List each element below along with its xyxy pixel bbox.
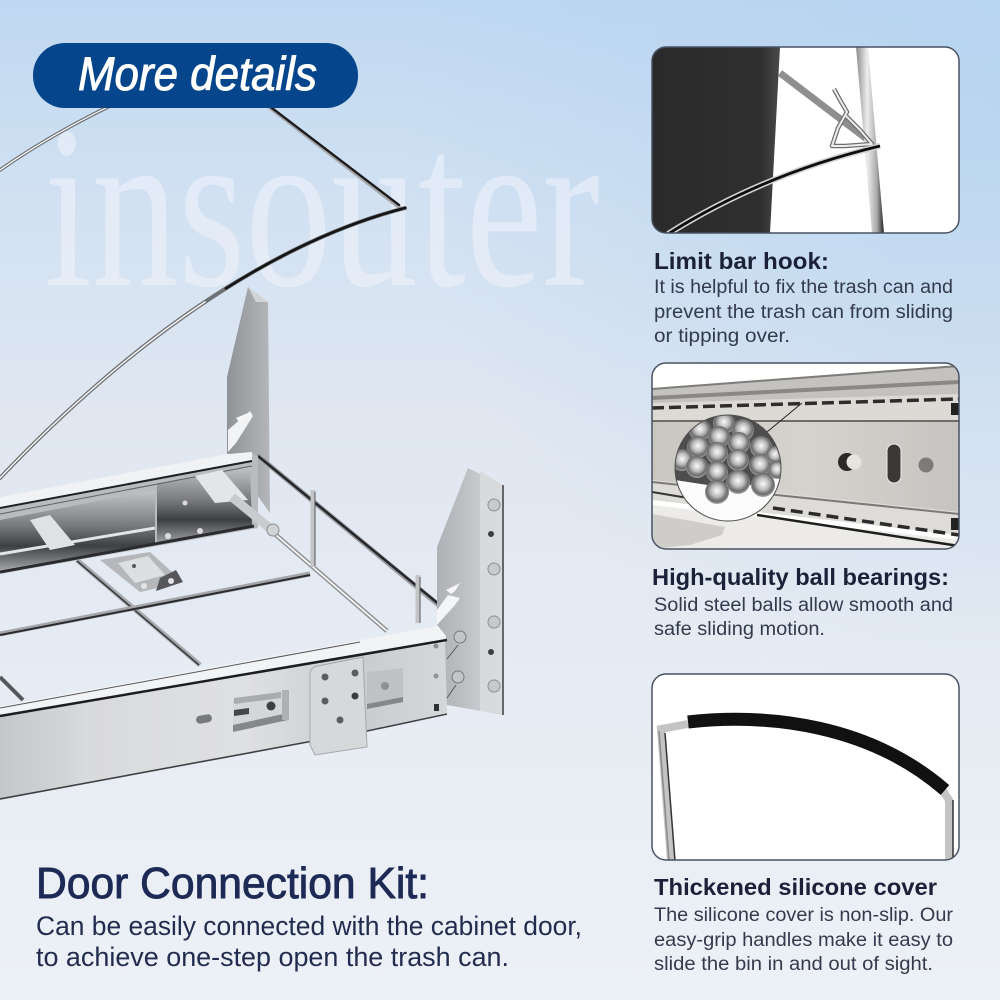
description	[654, 905, 954, 975]
heading: High-quality ball bearings:	[652, 564, 949, 590]
magnified ball bearings	[671, 412, 786, 521]
back bracket	[227, 287, 270, 513]
description: Solid steel balls allow smooth and	[654, 595, 953, 616]
panel: limit bar hook photo	[652, 47, 959, 234]
description: to achieve one-step open the trash can.	[36, 942, 509, 972]
pin	[232, 497, 279, 536]
text block: ball bearings	[652, 564, 953, 640]
slide rail	[652, 365, 959, 549]
screws	[447, 631, 466, 698]
description: safe sliding motion.	[654, 619, 825, 640]
text block: silicone cover	[654, 874, 954, 975]
heading pill: More details	[78, 47, 317, 100]
description: The silicone cover is non-slip. Our	[654, 905, 954, 926]
under-mount bracket	[100, 552, 183, 592]
handle wires	[0, 105, 405, 478]
hook	[832, 89, 872, 146]
heading: Limit bar hook:	[654, 248, 829, 274]
description: Can be easily connected with the cabinet door,	[36, 911, 582, 941]
door connection plate	[310, 657, 367, 755]
rack wires	[0, 455, 447, 700]
description	[36, 911, 582, 972]
slots	[838, 444, 934, 483]
text block: limit bar hook	[654, 248, 953, 347]
description: prevent the trash can from sliding	[654, 302, 953, 323]
pull-out rack illustration	[0, 105, 503, 800]
text block: door connection kit	[36, 859, 582, 972]
right wire	[943, 791, 949, 861]
limit bar	[780, 73, 868, 140]
panel: silicone cover photo	[652, 674, 959, 861]
back rail	[0, 452, 279, 574]
trash can	[652, 47, 780, 233]
end bracket	[437, 468, 503, 715]
heading: Thickened silicone cover	[654, 874, 937, 900]
description	[654, 595, 953, 640]
front rail	[0, 626, 447, 800]
black silicone cover	[688, 719, 945, 790]
heading: Door Connection Kit:	[36, 859, 429, 908]
vertical rod	[856, 47, 884, 233]
heading pill	[33, 43, 358, 108]
curved wire	[668, 146, 880, 234]
description: It is helpful to fix the trash can and	[654, 277, 953, 298]
description: slide the bin in and out of sight.	[654, 954, 933, 975]
description: easy-grip handles make it easy to	[654, 930, 953, 951]
description	[654, 277, 953, 347]
watermark: insouter	[44, 79, 600, 336]
panel: ball bearings photo	[652, 363, 959, 549]
left wire	[661, 724, 688, 861]
description: or tipping over.	[654, 326, 790, 347]
pointer line	[767, 403, 802, 432]
